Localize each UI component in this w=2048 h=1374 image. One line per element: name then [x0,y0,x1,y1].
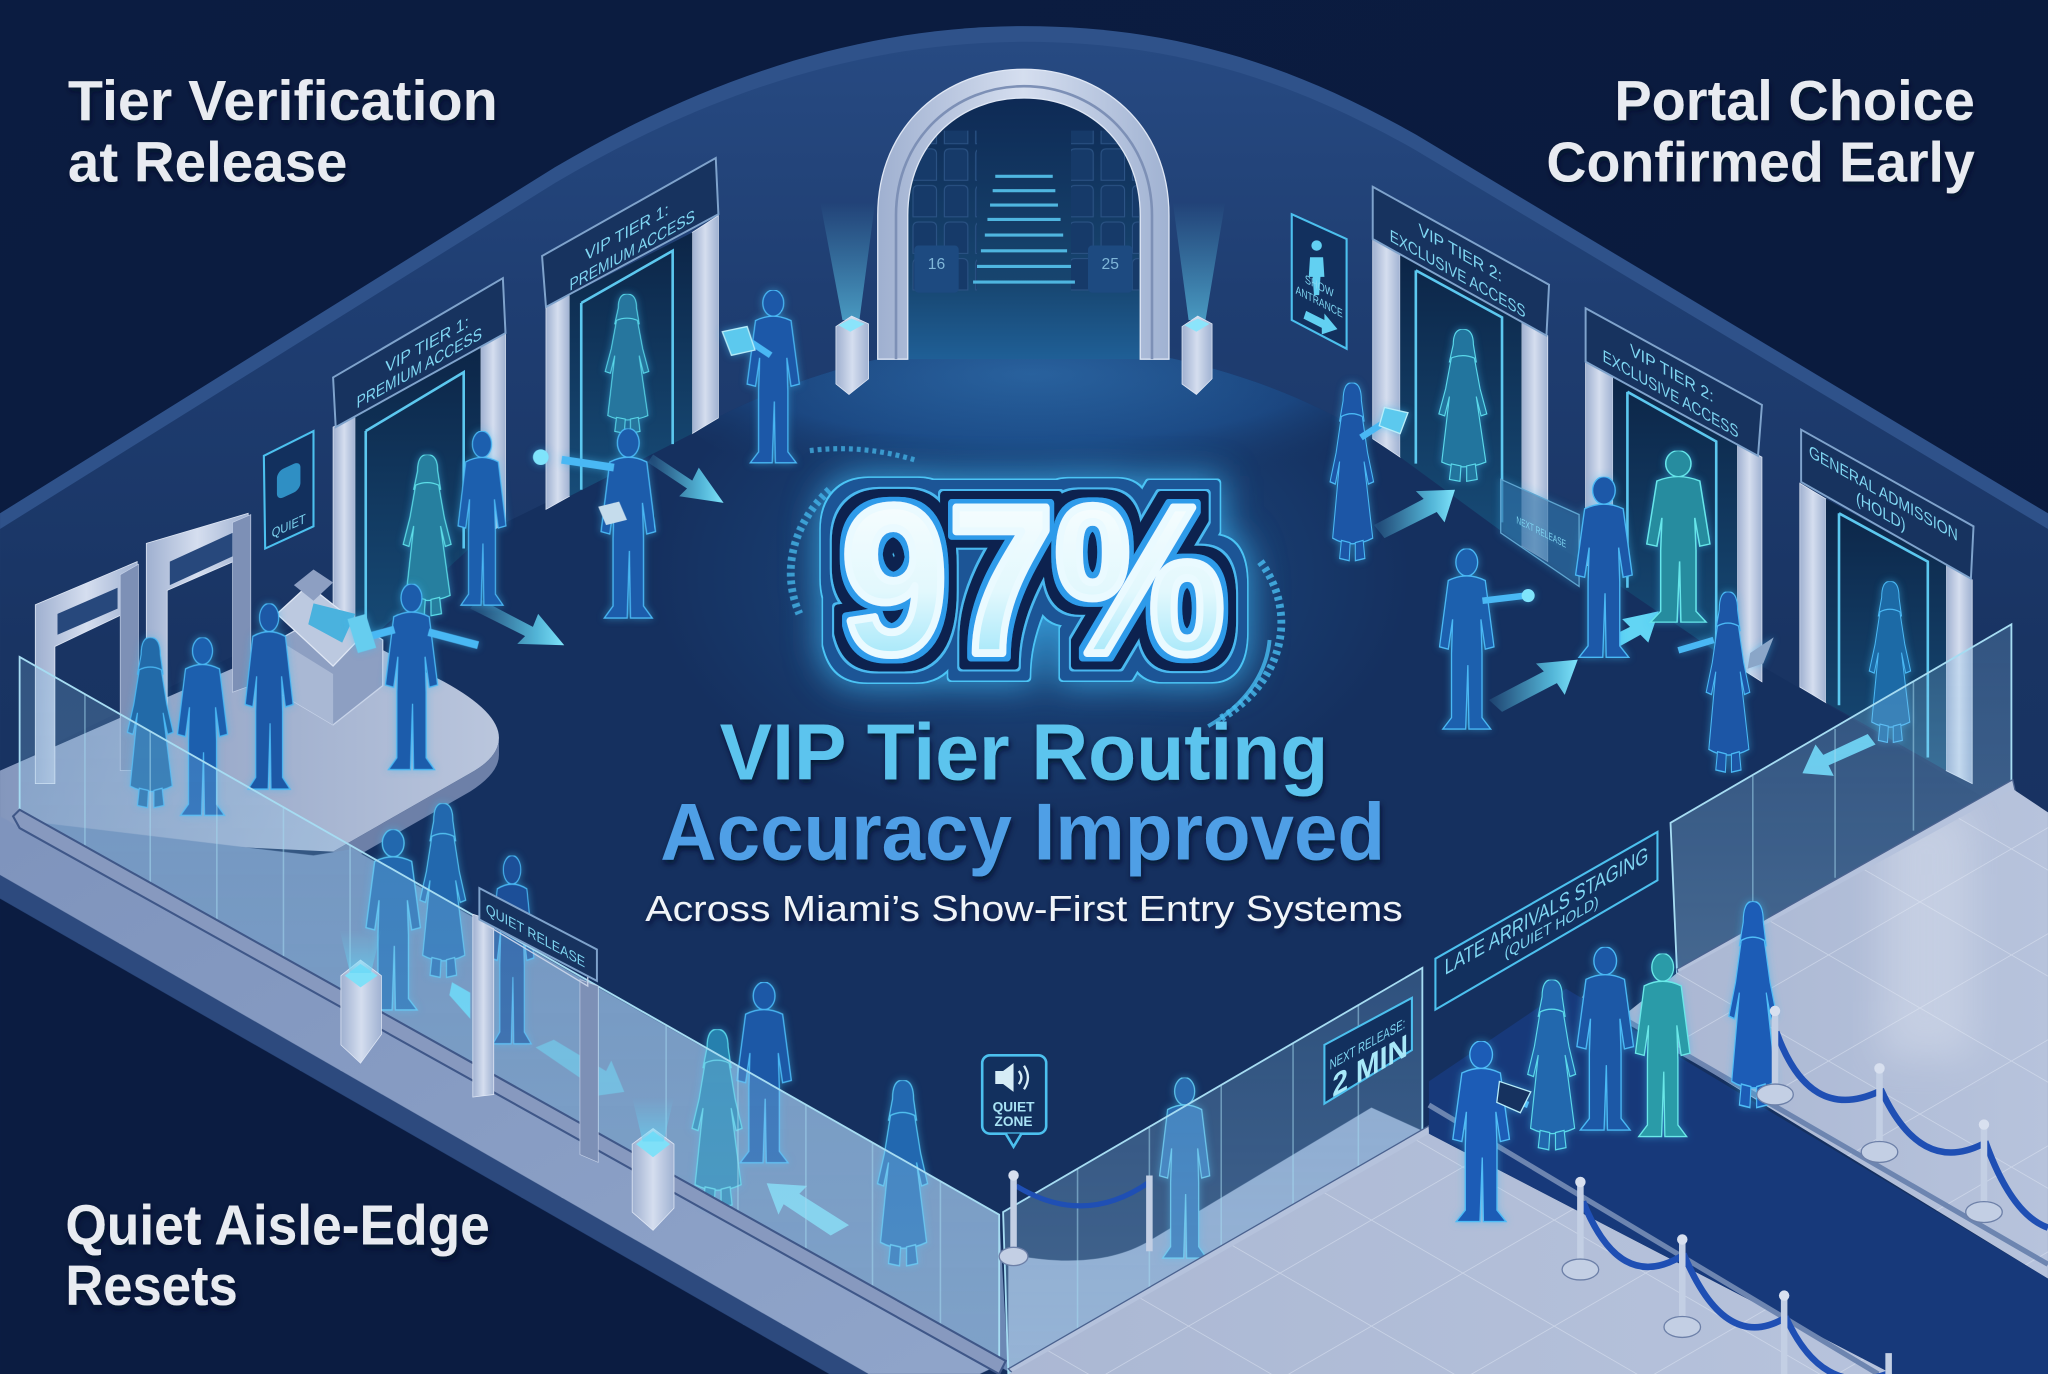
sign: quiet zone: ZONE [995,1114,1033,1129]
figure: staff scanning right [1440,549,1535,729]
figure: man walking [366,829,420,1010]
sign: show entrance: SHOW [1305,272,1334,300]
sign: PREMIUM ACCESS [357,323,482,412]
door: VIP Tier 2 first [1373,187,1549,562]
security gate front [35,562,138,784]
figure: staff with rope [878,1080,928,1266]
sign: EXCLUSIVE ACCESS [1390,225,1526,322]
people near doors [403,290,1911,772]
corner label: quiet aisle-edge: Quiet Aisle-Edge [65,1194,490,1257]
late arrivals queue [1453,901,1777,1222]
floor arrows lower [449,982,849,1236]
figure: staff at rope right [1160,1078,1210,1258]
headline line 2: Accuracy Improved [660,787,1385,877]
carpet [1429,989,2048,1374]
figure: staff scanning [533,428,655,618]
sign: show entrance: ANTRANCE [1296,283,1343,321]
arrow: quiet release [536,1040,624,1097]
sign: GENERAL ADMISSION [1809,441,1958,545]
figure: queue person 2 [177,637,228,815]
sign: VIP TIER 1: [385,311,469,377]
corner label: quiet aisle-edge [65,1194,490,1317]
door: VIP Tier 2 second [1586,308,1762,682]
sign: late arrivals staging: LATE ARRIVALS STAGING [1445,842,1648,981]
sign [1586,308,1762,456]
sign: EXCLUSIVE ACCESS [1603,345,1738,442]
sign [333,278,505,427]
rope centre [1016,1182,1149,1206]
floor seen through lower left glass [20,820,1008,1371]
figure: staff woman right [1678,592,1774,772]
figure: woman walking [420,803,466,977]
corner label: tier verification [68,69,498,194]
pedestal with beam right [1173,202,1225,394]
figure: man door A [458,431,506,605]
stairs [973,176,1075,282]
sign: quiet guest [264,431,313,549]
figure: woman door B [605,294,649,433]
tech frame arcs around number [791,449,1281,726]
figure: staff at quiet release [490,855,534,1044]
figure: queue person 3 [127,637,173,808]
corner label: quiet aisle-edge: Resets [65,1254,238,1317]
arrow 5 [1612,611,1659,648]
figure: woman lower [692,1029,742,1207]
figure: man lower [737,982,791,1163]
figure: woman at door C [1439,329,1487,481]
floor arrows [470,455,1876,776]
holographic screen: NEXT RELEASE [1516,515,1566,551]
sign: (HOLD) [1856,487,1906,535]
sign: quiet guest: QUIET [272,511,306,541]
glass barrier right [1671,624,2015,980]
floor [0,327,2048,1374]
door: General Admission [1800,430,1974,784]
figure: woman waiting [1528,980,1576,1150]
glass barrier lower centre [1003,968,1431,1374]
arrow: lower aisle [767,1183,849,1236]
quiet release frame [473,888,598,1162]
arrow 3 [1374,490,1455,538]
figure: woman door E [1869,581,1911,742]
figure: man waiting [1577,947,1634,1130]
pedestal with beam left [820,202,875,394]
posts [1014,1011,1984,1374]
pedestal lower middle [632,1097,674,1230]
figure: teal man waiting [1635,953,1690,1137]
sign [1373,187,1549,336]
figure: staff with tablet [722,290,799,463]
floor seen through lower right glass [1008,1108,1429,1374]
archway to theater [878,69,1169,359]
icon: speaker [995,1063,1014,1092]
sign: VIP TIER 2: [1630,339,1714,406]
figure: kiosk staff [347,584,478,770]
arrow 1 [470,598,564,645]
corner label: portal choice: Confirmed Early [1546,131,1975,194]
door: VIP Tier 1 upper [542,158,718,509]
figure: staff with tablet [1453,1041,1531,1222]
light floor upper right [1620,789,2048,1279]
arrow 2 [648,455,724,503]
arrow: up [449,982,470,1019]
figures behind lower left glass [366,803,1210,1266]
left platform [0,624,499,852]
arrow 6 [1802,734,1876,776]
sign: VIP TIER 1: [585,198,669,265]
corner label: portal choice: Portal Choice [1614,69,1975,132]
sign: quiet zone [982,1055,1046,1147]
corner label: tier verification: at Release [68,131,347,194]
sign: next release: NEXT RELEASE: [1330,1015,1405,1074]
theater seats [912,131,1139,293]
holographic screen [1501,479,1579,586]
figure: teal man door D [1647,451,1710,622]
figure: staff with tablet door C [1330,383,1408,561]
queue at kiosk [127,584,478,815]
icon: person [1309,240,1324,295]
rope row upper [1776,1032,2048,1228]
sign: VIP TIER 2: [1418,219,1502,286]
platform edge [333,738,499,865]
walkway lower left [0,816,999,1374]
pedestal lower left [340,930,381,1063]
sign: late arrivals staging [1435,832,1657,1010]
sign: next release [1324,998,1412,1105]
rope row lower [1583,1202,1887,1374]
97% big number: 97% [841,461,1225,698]
sign: late arrivals staging: (QUIET HOLD) [1505,892,1599,963]
corner label: tier verification: Tier Verification [68,69,498,132]
subheading: Across Miami’s Show-First Entry Systems [645,888,1403,929]
figure: queue person 1 [245,603,293,789]
arrow 4 [1489,660,1578,712]
sign: next release: 2 MIN [1332,1027,1408,1105]
outside dark zone lower left [0,899,829,1374]
sign: show entrance [1292,214,1347,349]
corner label: portal choice [1546,69,1975,194]
security gate rear [146,513,251,712]
back wall [0,26,2048,1045]
sign: QUIET RELEASE [486,901,585,971]
check-in kiosk [277,569,383,725]
glass barrier lower left [13,657,1006,1374]
theater seats: 16 [928,256,945,273]
light floor lower right [869,1134,1893,1374]
figure: teal woman door A [403,455,451,616]
stanchions and ropes [999,1006,2048,1374]
sign [542,158,718,307]
theater seats: 25 [1101,256,1119,273]
figure: man door D [1576,477,1632,657]
headline line 1: VIP Tier Routing [720,708,1328,797]
figure: staff woman [1729,901,1777,1108]
sign: PREMIUM ACCESS [569,205,695,295]
sign: quiet zone: QUIET [993,1099,1035,1114]
door: VIP Tier 1 left [333,278,505,666]
